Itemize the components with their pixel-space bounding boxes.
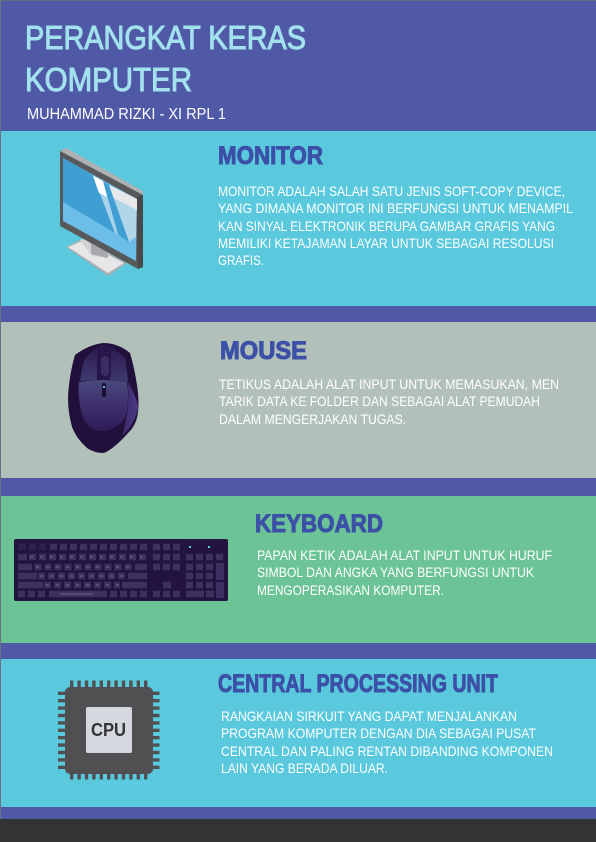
panel: keyboard — [14, 510, 552, 601]
text: cpu description: RANGKAIAN SIRKUIT YANG DAPAT MENJALANKAN — [221, 709, 517, 724]
text: mouse description — [219, 377, 559, 427]
keyboard panel background — [0, 496, 596, 643]
panel: mouse — [68, 337, 559, 453]
divider band 3 — [0, 643, 596, 659]
subtitle: author: MUHAMMAD RIZKI - XI RPL 1 — [27, 106, 226, 123]
text: mouse description: DALAM MENGERJAKAN TUGAS. — [219, 412, 406, 427]
heading: monitor: MONITOR — [218, 142, 323, 170]
text: mouse description: TETIKUS ADALAH ALAT INPUT UNTUK MEMASUKAN, MEN — [219, 377, 559, 392]
text: monitor description: KAN SINYAL ELEKTRONIK BERUPA GAMBAR GRAFIS YANG — [218, 219, 555, 234]
text: cpu description — [221, 709, 553, 776]
text: cpu description: CENTRAL DAN PALING RENTAN DIBANDING KOMPONEN — [221, 744, 553, 759]
text: cpu description: PROGRAM KOMPUTER DENGAN DIA SEBAGAI PUSAT — [221, 726, 536, 741]
panel: central processing unit — [62, 670, 553, 776]
cpu panel background — [0, 659, 596, 807]
title — [25, 19, 306, 98]
icon: mouse — [68, 343, 138, 453]
icon: monitor — [60, 148, 143, 276]
icon: cpu chip: CPU — [91, 720, 126, 740]
header band — [0, 0, 596, 131]
text: keyboard description — [257, 548, 552, 598]
text: monitor description — [218, 184, 573, 268]
heading: mouse: MOUSE — [220, 337, 307, 365]
text: monitor description: GRAFIS. — [218, 253, 264, 268]
monitor panel background — [0, 131, 596, 306]
icon: keyboard — [14, 539, 228, 601]
heading: central processing unit: CENTRAL PROCESSING UNIT — [218, 670, 498, 698]
heading: keyboard: KEYBOARD — [255, 510, 383, 538]
text: cpu description: LAIN YANG BERADA DILUAR. — [221, 761, 388, 776]
text: keyboard description: SIMBOL DAN ANGKA YANG BERFUNGSI UNTUK — [257, 565, 534, 580]
title: KOMPUTER — [25, 61, 192, 98]
divider band 2 — [0, 478, 596, 496]
mouse panel background — [0, 322, 596, 478]
divider band 4 — [0, 807, 596, 819]
text: keyboard description: MENGOPERASIKAN KOMPUTER. — [257, 583, 444, 598]
divider band 1 — [0, 306, 596, 322]
text: keyboard description: PAPAN KETIK ADALAH ALAT INPUT UNTUK HURUF — [257, 548, 552, 563]
title: PERANGKAT KERAS — [25, 19, 306, 56]
text: monitor description: MEMILIKI KETAJAMAN LAYAR UNTUK SEBAGAI RESOLUSI — [218, 236, 554, 251]
panel: monitor — [60, 142, 573, 276]
icon: cpu chip — [62, 684, 156, 776]
footer band — [0, 819, 596, 842]
text: mouse description: TARIK DATA KE FOLDER DAN SEBAGAI ALAT PEMUDAH — [219, 394, 540, 409]
